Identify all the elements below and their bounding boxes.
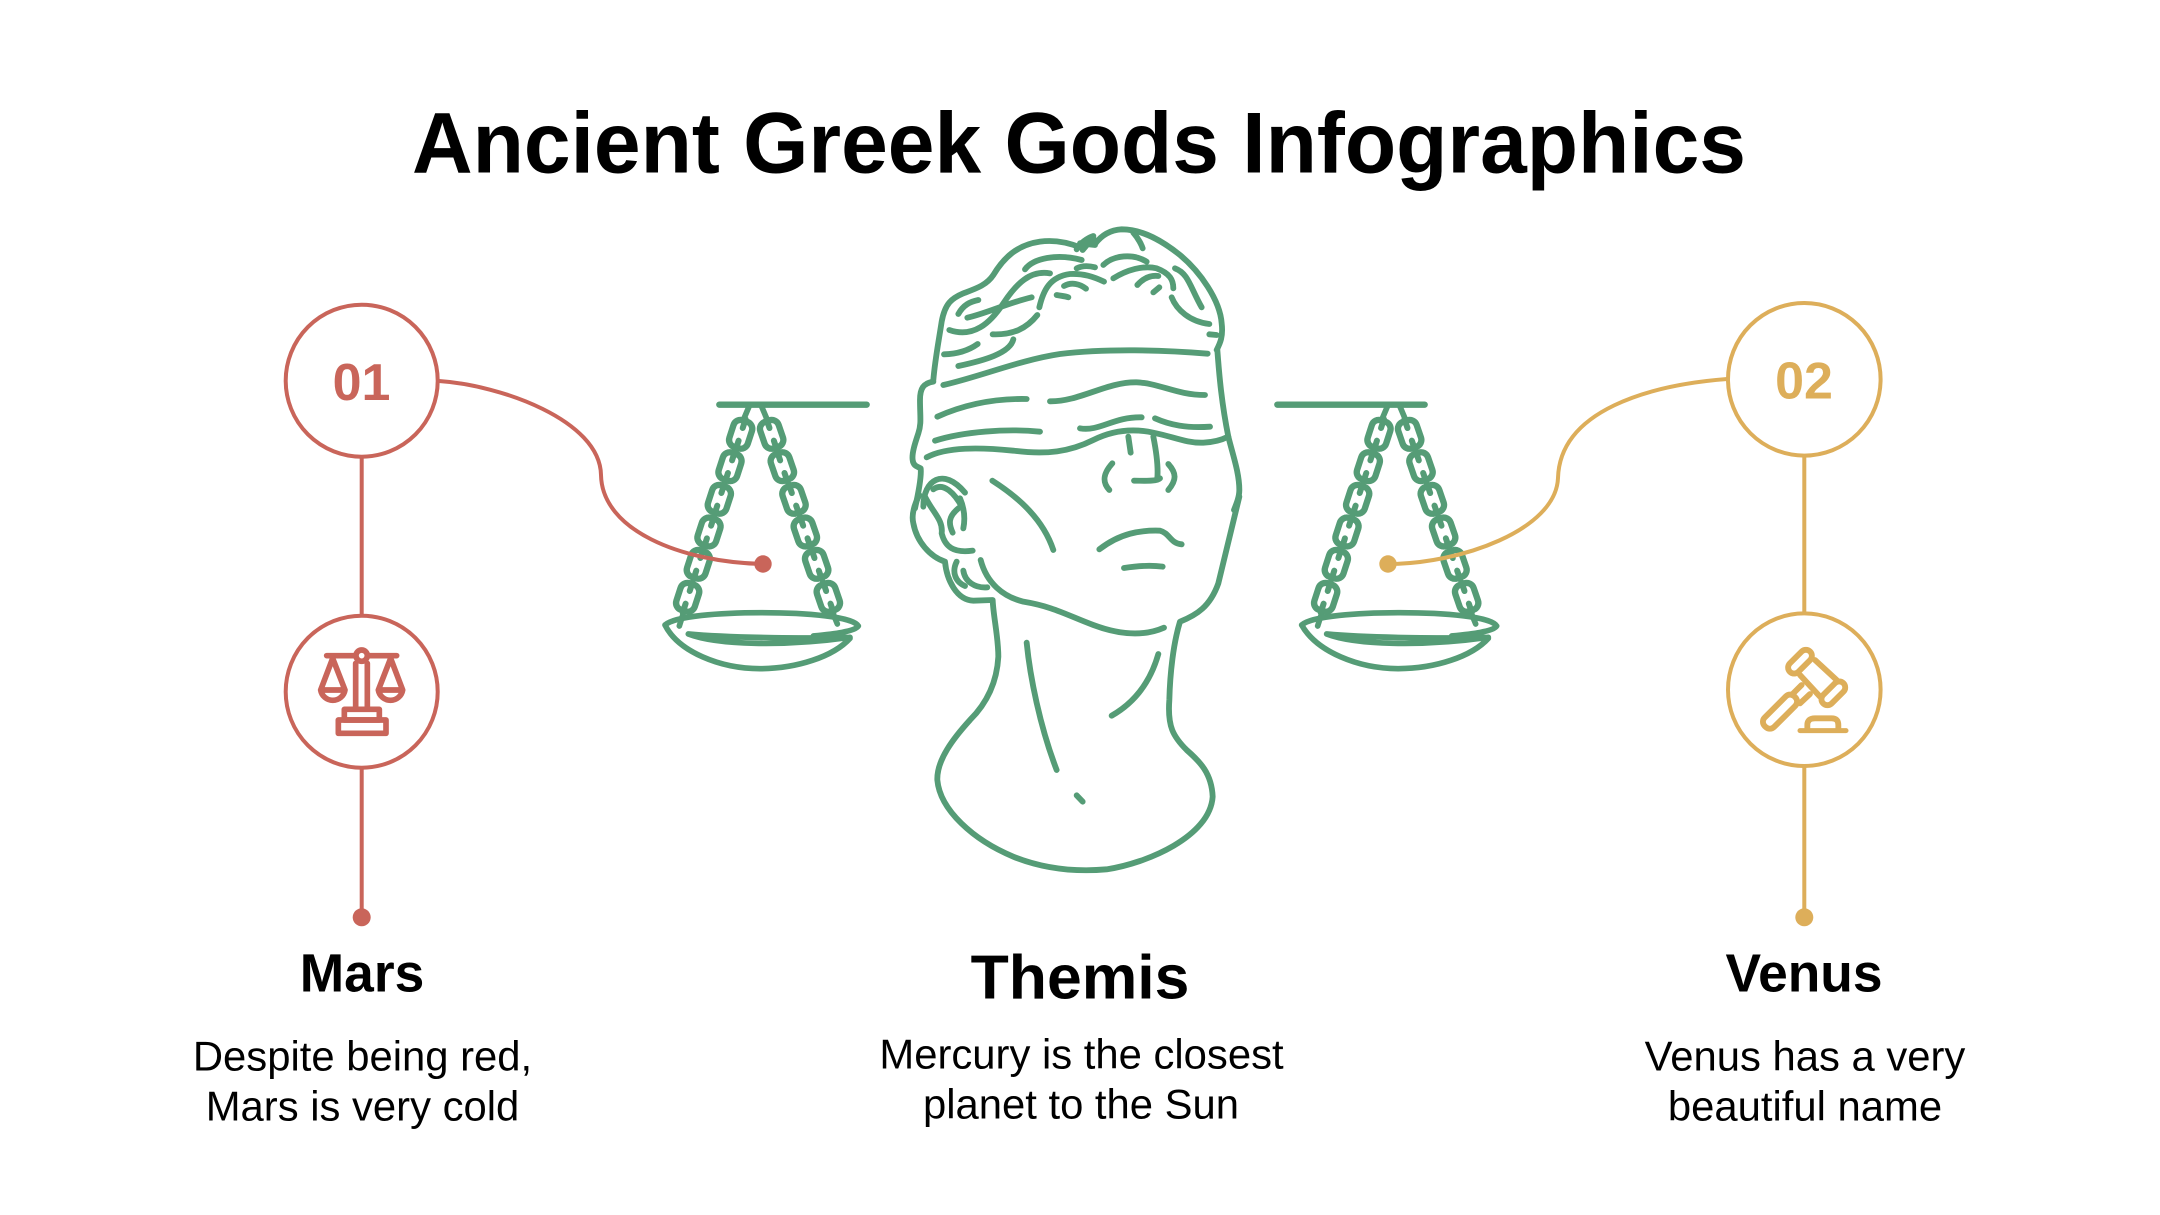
Themis text: planet to the Sun [923, 1081, 1239, 1128]
number circle 02 [1728, 303, 1881, 456]
Themis text [879, 942, 1284, 1128]
right scale pan with chains [1277, 405, 1497, 669]
beam [719, 395, 867, 414]
end dot [353, 908, 371, 926]
left scale pan with chains [665, 405, 867, 669]
number circle 01: 01 [333, 354, 390, 412]
Venus text: beautiful name [1668, 1082, 1942, 1129]
Venus text: Venus [1725, 944, 1883, 1003]
Venus text [1645, 944, 1965, 1129]
Mars text [193, 944, 532, 1129]
title: Ancient Greek Gods Infographics [412, 96, 1746, 192]
end dot [1795, 908, 1813, 926]
icon circle: gavel [1728, 613, 1881, 766]
Mars text: Mars [300, 944, 424, 1003]
Venus column [1728, 303, 1881, 926]
Mars column [286, 305, 438, 926]
icon circle: balance scale [286, 616, 438, 768]
illustration: Themis bust [912, 229, 1239, 870]
Venus text: Venus has a very [1645, 1032, 1965, 1079]
number circle 01 [286, 305, 438, 457]
Themis text: Themis [971, 942, 1189, 1012]
beam [1277, 395, 1425, 414]
Mars text: Despite being red, [193, 1032, 532, 1079]
Mars text: Mars is very cold [206, 1082, 519, 1129]
connector: Mars to left pan [439, 381, 772, 573]
Themis text: Mercury is the closest [879, 1031, 1284, 1078]
head: lower part with face, neck and shoulders [913, 481, 1239, 870]
number circle 02: 02 [1775, 352, 1833, 410]
connector: Venus to right pan [1379, 379, 1727, 573]
head: upper part with hair and blindfold [912, 229, 1239, 510]
